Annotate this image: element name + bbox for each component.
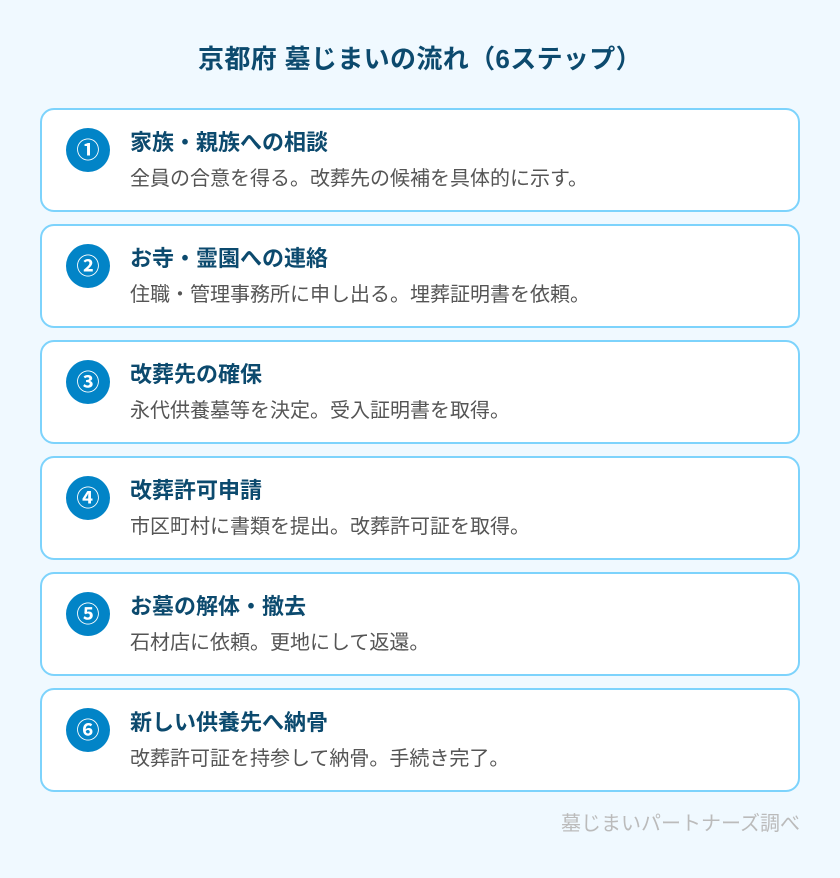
step 3 number — [66, 360, 110, 404]
step 4 number — [66, 476, 110, 520]
step 2 description: 住職・管理事務所に申し出る。埋葬証明書を依頼。 — [130, 284, 590, 306]
step 6 heading: 新しい供養先へ納骨 — [130, 710, 328, 735]
step 5 number: ⑤ — [76, 601, 100, 627]
panel: step 3 — [40, 340, 800, 444]
step 4 number: ④ — [76, 485, 100, 511]
panel: step 6 — [40, 688, 800, 792]
step 1 number — [66, 128, 110, 172]
panel: step 4 — [40, 456, 800, 560]
step 2 number: ② — [76, 253, 100, 279]
step 5 heading: お墓の解体・撤去 — [130, 594, 306, 619]
step 5 number — [66, 592, 110, 636]
footer source note: 墓じまいパートナーズ調べ — [561, 813, 800, 835]
step 1 number: ① — [76, 137, 100, 163]
step 6 number: ⑥ — [76, 717, 100, 743]
step 3 number: ③ — [76, 369, 100, 395]
panel: step 1 — [40, 108, 800, 212]
step 3 description: 永代供養墓等を決定。受入証明書を取得。 — [130, 400, 510, 422]
step 3 heading: 改葬先の確保 — [130, 362, 262, 387]
step 1 description: 全員の合意を得る。改葬先の候補を具体的に示す。 — [130, 168, 588, 190]
step 4 heading: 改葬許可申請 — [130, 478, 262, 503]
step 2 heading: お寺・霊園への連絡 — [130, 246, 328, 271]
panel: step 2 — [40, 224, 800, 328]
title: 京都府 墓じまいの流れ（6ステップ） — [198, 44, 642, 74]
step 6 description: 改葬許可証を持参して納骨。手続き完了。 — [130, 748, 509, 770]
step 1 heading: 家族・親族への相談 — [130, 130, 328, 155]
step 5 description: 石材店に依頼。更地にして返還。 — [130, 632, 429, 654]
panel: step 5 — [40, 572, 800, 676]
step 2 number — [66, 244, 110, 288]
step 6 number — [66, 708, 110, 752]
step 4 description: 市区町村に書類を提出。改葬許可証を取得。 — [130, 516, 530, 538]
